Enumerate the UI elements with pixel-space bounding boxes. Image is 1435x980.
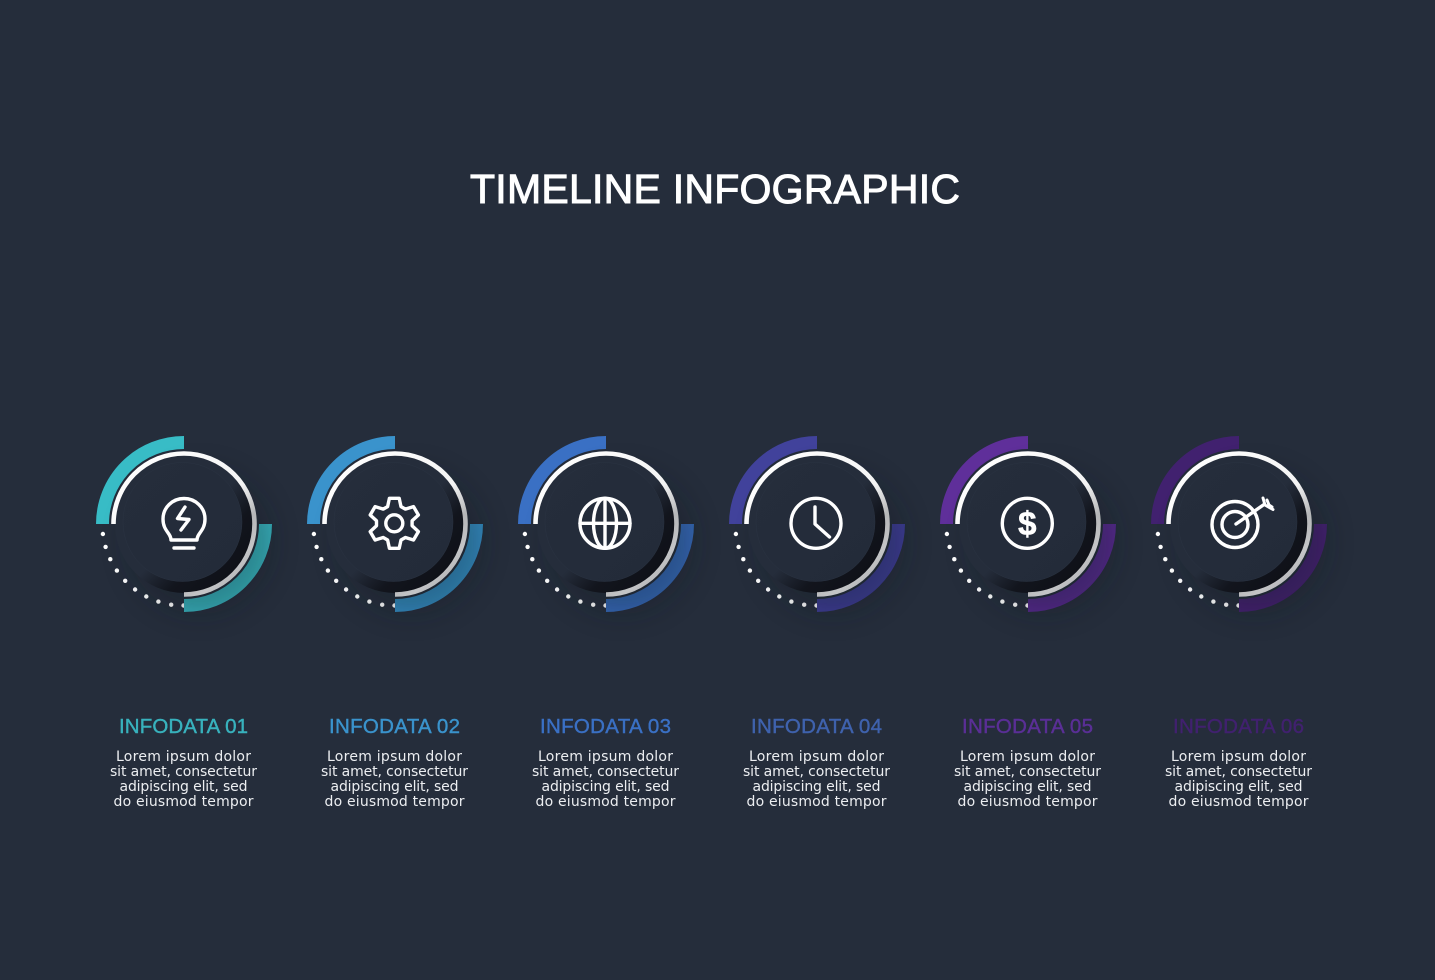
step 02 text: sit amet, consectetur — [321, 764, 468, 780]
step 06 text: INFODATA 06 — [1173, 715, 1304, 738]
step 04 graphic: clock — [734, 442, 905, 614]
step 04 text: Lorem ipsum dolor — [749, 749, 884, 765]
icon: lightbulb — [163, 498, 205, 548]
step 02 text: Lorem ipsum dolor — [327, 749, 462, 765]
step 03 graphic: globe — [523, 442, 694, 614]
step 03 text: INFODATA 03 — [540, 715, 671, 738]
step 06 text: sit amet, consectetur — [1165, 764, 1312, 780]
step 06 graphic: target — [1156, 442, 1327, 614]
step 01 text: Lorem ipsum dolor — [116, 749, 251, 765]
icon: gear — [370, 498, 418, 548]
step 01 text: do eiusmod tempor — [114, 794, 254, 810]
step 04 text — [743, 715, 890, 810]
step 04 text: sit amet, consectetur — [743, 764, 890, 780]
step 05 text: INFODATA 05 — [962, 715, 1093, 738]
step 05 text: sit amet, consectetur — [954, 764, 1101, 780]
step 05 text: adipiscing elit, sed — [964, 779, 1092, 795]
step 05 graphic: dollar — [945, 442, 1116, 614]
step 01 text: adipiscing elit, sed — [120, 779, 248, 795]
icon: dollar coin: $ — [1018, 505, 1036, 542]
icon: globe — [580, 498, 630, 548]
step 06 text: Lorem ipsum dolor — [1171, 749, 1306, 765]
icon: clock — [791, 498, 841, 548]
step 01 text: sit amet, consectetur — [110, 764, 257, 780]
step 02 text: adipiscing elit, sed — [330, 779, 458, 795]
step 02 text: do eiusmod tempor — [324, 794, 465, 810]
step 01 text: INFODATA 01 — [119, 715, 248, 738]
step 02 text: INFODATA 02 — [329, 715, 460, 738]
title: TIMELINE INFOGRAPHIC — [470, 166, 960, 212]
step 04 text: adipiscing elit, sed — [752, 779, 880, 795]
step 04 text: INFODATA 04 — [751, 715, 882, 738]
step 05 text — [954, 715, 1101, 810]
step 03 text: Lorem ipsum dolor — [538, 749, 673, 765]
step 01 text — [110, 715, 257, 810]
step 06 text: adipiscing elit, sed — [1174, 779, 1302, 795]
step 06 text: do eiusmod tempor — [1168, 794, 1309, 810]
step 03 text — [532, 715, 679, 810]
step 03 text: adipiscing elit, sed — [542, 779, 670, 795]
step 02 graphic: gear — [312, 442, 483, 614]
icon: target with arrow — [1212, 498, 1273, 548]
step 05 text: do eiusmod tempor — [958, 794, 1098, 810]
step 01 graphic: lightbulb — [101, 442, 272, 614]
step 04 text: do eiusmod tempor — [746, 794, 887, 810]
step 05 text: Lorem ipsum dolor — [960, 749, 1095, 765]
step 06 text — [1165, 715, 1312, 810]
step 03 text: sit amet, consectetur — [532, 764, 679, 780]
icon: dollar coin — [1002, 498, 1052, 548]
step 02 text — [321, 715, 468, 810]
step 03 text: do eiusmod tempor — [536, 794, 676, 810]
